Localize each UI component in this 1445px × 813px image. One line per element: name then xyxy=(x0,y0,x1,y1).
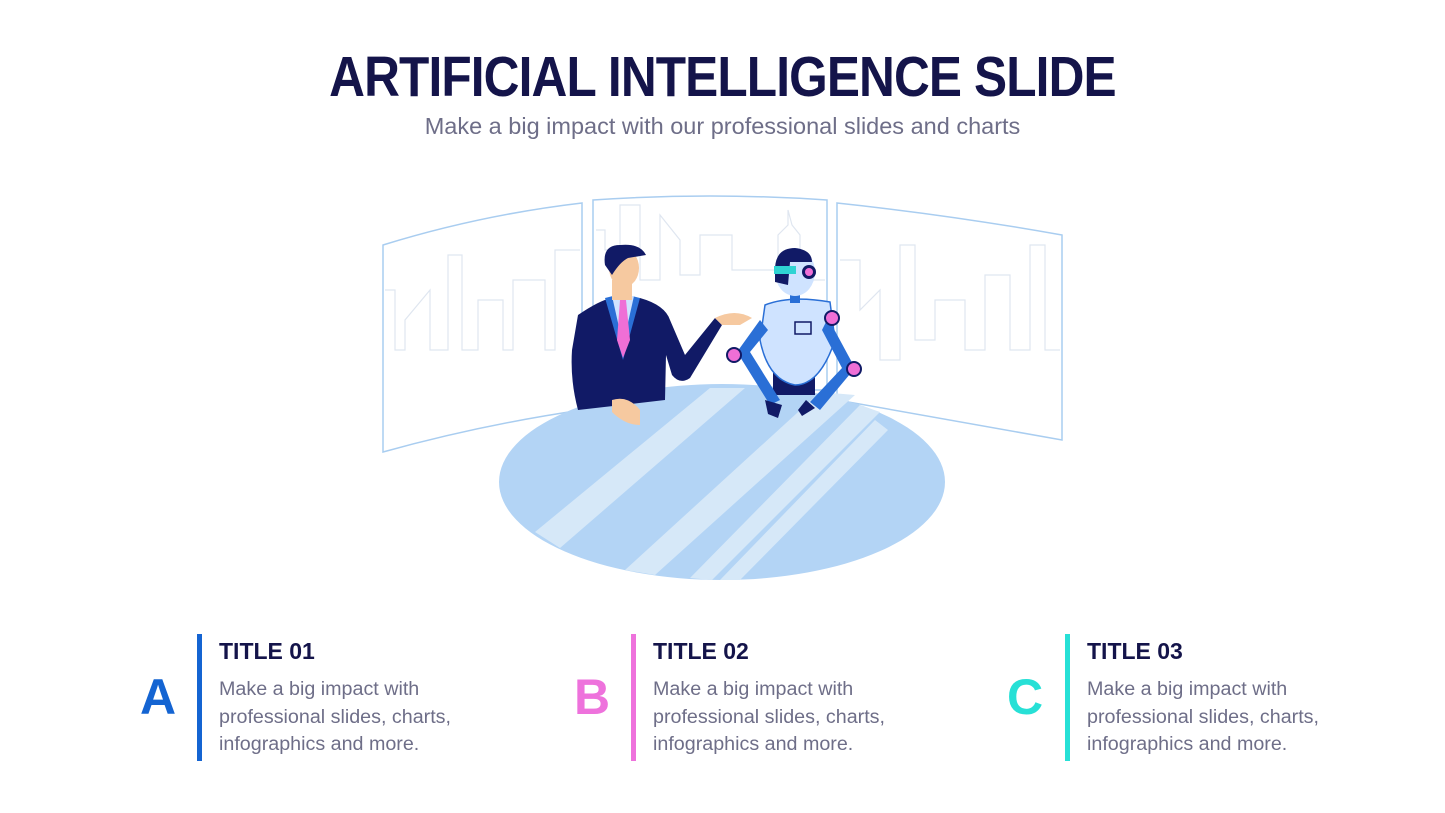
text B: Make a big impact with xyxy=(653,678,853,700)
table xyxy=(499,384,945,580)
screens with city skyline xyxy=(383,196,1062,452)
section A xyxy=(197,634,451,761)
heading A: TITLE 01 xyxy=(219,638,315,664)
text A xyxy=(219,678,451,755)
subtitle: Make a big impact with our professional slides and charts xyxy=(425,113,1020,139)
text A: infographics and more. xyxy=(219,733,419,755)
heading C: TITLE 03 xyxy=(1087,638,1183,664)
text A: Make a big impact with xyxy=(219,678,419,700)
text A: professional slides, charts, xyxy=(219,706,451,728)
title: ARTIFICIAL INTELLIGENCE SLIDE xyxy=(329,45,1116,109)
letter C: C xyxy=(1007,669,1043,725)
section B xyxy=(631,634,885,761)
text B: infographics and more. xyxy=(653,733,853,755)
text B xyxy=(653,678,885,755)
text C xyxy=(1087,678,1319,755)
heading B: TITLE 02 xyxy=(653,638,749,664)
letter B: B xyxy=(574,669,610,725)
bar B xyxy=(631,634,636,761)
robot xyxy=(727,248,861,418)
man xyxy=(572,245,752,425)
bar C xyxy=(1065,634,1070,761)
text C: infographics and more. xyxy=(1087,733,1287,755)
section C xyxy=(1065,634,1319,761)
text C: Make a big impact with xyxy=(1087,678,1287,700)
letter A: A xyxy=(140,669,176,725)
text C: professional slides, charts, xyxy=(1087,706,1319,728)
text B: professional slides, charts, xyxy=(653,706,885,728)
bar A xyxy=(197,634,202,761)
